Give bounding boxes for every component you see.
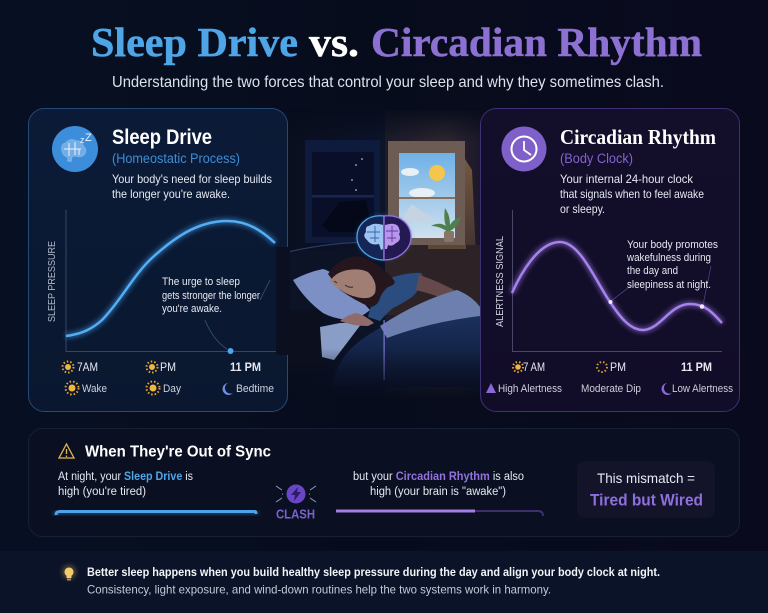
day window xyxy=(388,141,478,300)
callout: gets stronger the longer xyxy=(162,290,260,302)
time labels: PM xyxy=(160,362,176,374)
time labels: 11 PM xyxy=(681,362,712,374)
description: or sleepy. xyxy=(560,202,605,216)
callout: Your body promotes xyxy=(627,239,718,251)
blue shirt xyxy=(368,273,424,321)
mismatch callout xyxy=(577,461,715,518)
time labels: PM xyxy=(610,362,626,374)
plant xyxy=(431,208,461,242)
pillow xyxy=(293,269,370,320)
phase labels: Day xyxy=(163,383,181,395)
description xyxy=(112,172,272,201)
headboard overlapping panel edge xyxy=(276,247,290,355)
description xyxy=(560,172,704,216)
circadian statement: but your Circadian Rhythm is also xyxy=(353,471,524,483)
sleep drive statement: high (you're tired) xyxy=(58,486,146,498)
bed sheet xyxy=(320,323,362,360)
icon: brain with zzz: z xyxy=(80,135,85,145)
phase labels: Low Alertness xyxy=(672,383,733,395)
mismatch callout: This mismatch = xyxy=(597,470,695,486)
clash label: CLASH xyxy=(276,508,315,522)
subheading: (Homeostatic Process) xyxy=(112,151,240,166)
time labels xyxy=(513,362,712,374)
panel: sleep drive xyxy=(28,108,288,412)
time labels: 11 PM xyxy=(230,362,261,374)
chart: alertness signal curve xyxy=(494,210,722,352)
description: that signals when to feel awake xyxy=(560,187,704,201)
callout xyxy=(626,239,718,291)
footer strip xyxy=(0,551,768,613)
description: Your body's need for sleep builds xyxy=(112,172,272,186)
nightstand xyxy=(276,310,324,372)
phase labels: Bedtime xyxy=(236,383,274,395)
chart: sleep pressure curve xyxy=(46,210,276,354)
chart: alertness signal curve: ALERTNESS SIGNAL xyxy=(494,236,506,327)
time labels: 7 AM xyxy=(523,362,545,374)
icon: brain with zzz: Z xyxy=(85,132,92,144)
icon: light bulb xyxy=(62,565,76,580)
footer message: Better sleep happens when you build healthy sleep pressure during the day and align your body clock at night. xyxy=(87,565,660,579)
chart: sleep pressure curve: SLEEP PRESSURE xyxy=(46,241,58,322)
mismatch callout: Tired but Wired xyxy=(590,490,703,510)
brain thought bubble xyxy=(357,215,411,260)
panel: circadian rhythm xyxy=(480,108,740,412)
panel: out of sync xyxy=(28,428,740,536)
heading: Circadian Rhythm xyxy=(560,125,716,149)
callout xyxy=(162,276,260,315)
callout: sleepiness at night. xyxy=(627,279,711,291)
night window xyxy=(305,140,380,243)
phase labels: Wake xyxy=(82,383,107,395)
icon: warning triangle xyxy=(59,444,74,458)
title xyxy=(91,19,702,65)
callout: you're awake. xyxy=(162,303,222,315)
callout: the day and xyxy=(627,265,678,277)
circadian statement: high (your brain is "awake") xyxy=(370,486,506,498)
circadian bar xyxy=(336,511,543,516)
sleep drive statement xyxy=(58,471,193,498)
subtitle: Understanding the two forces that control your sleep and why they sometimes clash. xyxy=(112,74,664,91)
icon: clock xyxy=(502,126,546,172)
description: Your internal 24-hour clock xyxy=(560,172,694,186)
icon: brain with zzz xyxy=(52,126,98,172)
phase labels xyxy=(486,383,733,395)
phase labels: High Alertness xyxy=(498,383,562,395)
heading: Sleep Drive xyxy=(112,126,212,149)
phase labels xyxy=(66,382,274,395)
callout: The urge to sleep xyxy=(162,276,240,288)
phase labels: Moderate Dip xyxy=(581,383,641,395)
icon: clash lightning xyxy=(276,484,316,504)
title: Sleep Drive xyxy=(91,19,298,65)
title: vs. xyxy=(309,19,359,65)
subheading: (Body Clock) xyxy=(560,151,633,166)
circadian statement xyxy=(353,471,524,498)
description: the longer you're awake. xyxy=(112,187,230,201)
sleep drive bar xyxy=(56,512,256,515)
footer detail: Consistency, light exposure, and wind-down routines help the two systems work in harmony. xyxy=(87,582,551,596)
illustration: person sleeping between night and day xyxy=(276,108,480,400)
section heading: When They're Out of Sync xyxy=(85,444,271,460)
title: Circadian Rhythm xyxy=(371,19,702,65)
sleep drive statement: At night, your Sleep Drive is xyxy=(58,471,193,483)
callout: wakefulness during xyxy=(626,252,711,264)
time labels: 7AM xyxy=(77,362,98,374)
time labels xyxy=(62,362,261,374)
blanket xyxy=(333,296,480,387)
hair and face xyxy=(328,257,395,307)
arm xyxy=(416,275,474,306)
